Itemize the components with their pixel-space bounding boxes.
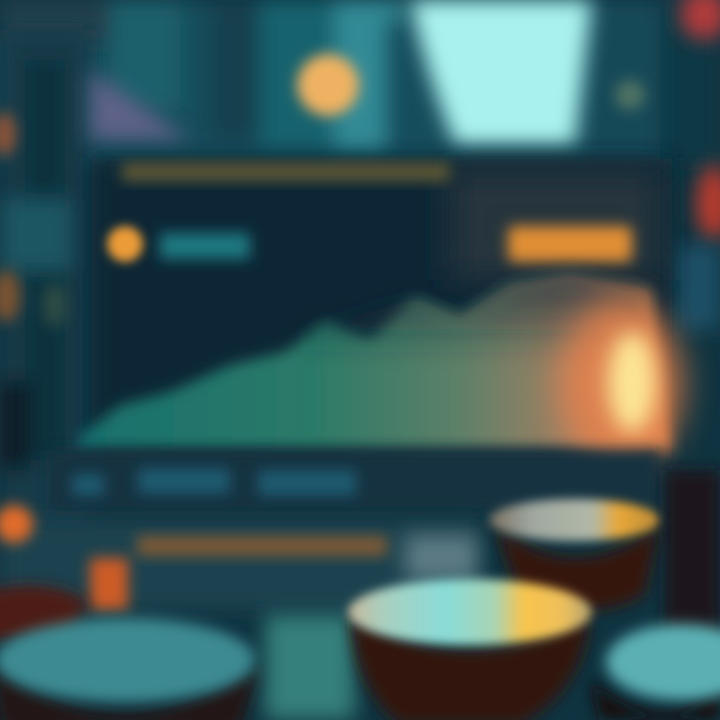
far right dark bowl [665, 470, 720, 640]
axis labels [72, 468, 356, 496]
chart glow core [608, 332, 656, 432]
lower light patch [405, 535, 477, 580]
right rear bowl [489, 499, 661, 610]
bottom right bowl [590, 624, 720, 720]
lower caption bar [137, 536, 387, 556]
right edge panel [672, 245, 720, 330]
legend dot [107, 226, 143, 262]
axis label band [50, 450, 660, 512]
area chart [78, 275, 670, 450]
small distant light [615, 80, 645, 110]
center base [265, 615, 355, 720]
panel upper-right haze [450, 170, 660, 280]
orange sun circle [297, 54, 359, 116]
sky [410, 0, 592, 145]
red lights on right [680, 0, 720, 241]
chart title bar [122, 163, 450, 181]
chart glow halo [560, 301, 684, 469]
left edge orange lights [0, 112, 67, 327]
left orange markers [0, 505, 128, 610]
legend label [160, 233, 250, 259]
lower band [0, 520, 480, 610]
background: city buildings [0, 0, 720, 170]
value label [508, 226, 632, 262]
chart panel [92, 158, 672, 458]
left tower [0, 30, 90, 530]
area chart top fade [300, 275, 650, 360]
bottom left bowl [0, 585, 262, 720]
purple roof shape [90, 70, 190, 140]
center bowl [348, 579, 592, 720]
